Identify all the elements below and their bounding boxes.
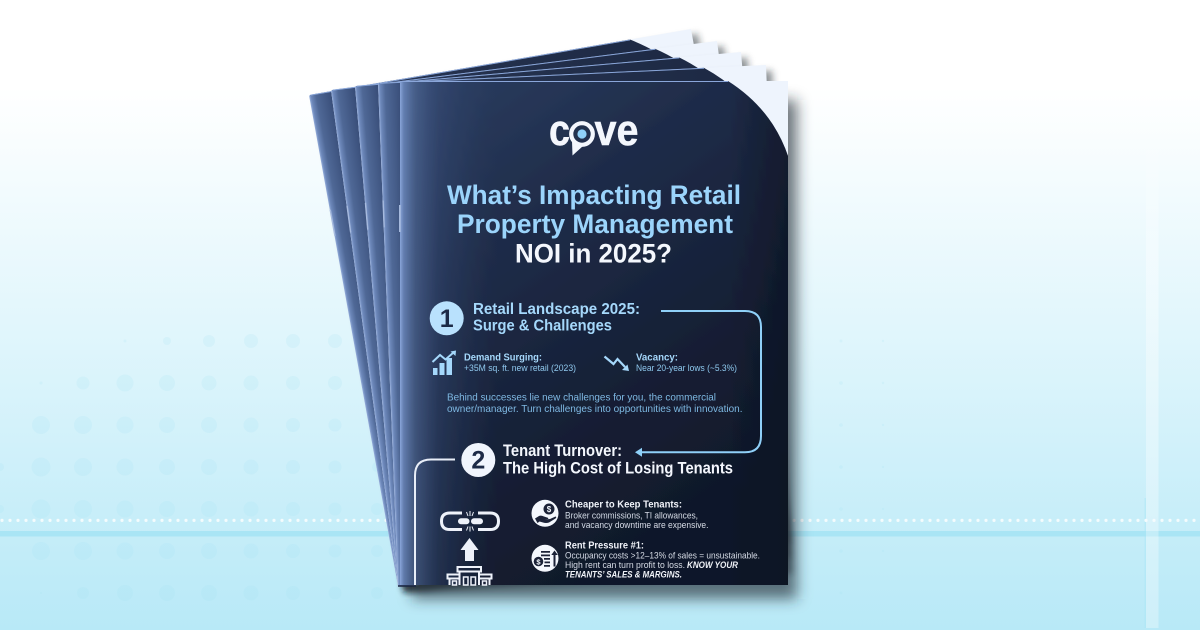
- horizontal blue band: [0, 531, 1200, 536]
- front cover shadow: [412, 100, 797, 599]
- item: cheaper to keep tenants: [532, 499, 708, 530]
- item: rent pressure: High rent can turn profit to loss.: [565, 560, 685, 570]
- item: rent pressure: Occupancy costs >12–13% of sales = unsustainable.: [565, 551, 760, 561]
- back booklet 2: [331, 40, 791, 592]
- section 1 heading: Surge & Challenges: [473, 318, 612, 335]
- icon: falling trend arrow: [604, 356, 629, 371]
- paragraph: challenges: Behind successes lie new challenges for you, the commercial: [447, 391, 716, 403]
- icon: hand holding coin: $: [547, 505, 552, 514]
- section 2 heading: [461, 442, 733, 477]
- number badge 1: [430, 301, 464, 335]
- dot grid pattern: [0, 334, 884, 601]
- number badge 2: [461, 443, 495, 477]
- stat: demand surging: [432, 350, 576, 375]
- title: [447, 180, 741, 269]
- title: Property Management: [457, 209, 733, 239]
- arrow: section 1 to section 2: [635, 311, 761, 457]
- section 2 heading: Tenant Turnover:: [503, 442, 622, 460]
- front booklet cover: [398, 81, 788, 586]
- item: cheaper to keep tenants: Cheaper to Keep Tenants:: [565, 499, 682, 511]
- paragraph: challenges: owner/manager. Turn challenges into opportunities with innovation.: [447, 403, 742, 415]
- icon: coin stack with up arrow: [532, 545, 558, 572]
- cover panel: [398, 81, 788, 586]
- white page corner: [400, 81, 788, 585]
- back booklet 3: [355, 51, 790, 592]
- icon: hand holding coin: [532, 500, 558, 527]
- back booklet 1: [309, 28, 787, 592]
- stat: vacancy: [604, 352, 737, 373]
- item: rent pressure: [532, 539, 760, 579]
- item: rent pressure: TENANTS’ SALES & MARGINS.: [565, 569, 682, 579]
- paragraph: challenges: [447, 391, 742, 415]
- stat: vacancy: Near 20-year lows (~5.3%): [636, 363, 737, 373]
- connector: white line from section 2: [415, 460, 455, 585]
- item: cheaper to keep tenants: and vacancy downtime are expensive.: [565, 520, 708, 530]
- icon: broken chain: [442, 511, 498, 532]
- item: rent pressure: Rent Pressure #1:: [565, 539, 644, 551]
- item: cheaper to keep tenants: Broker commissions, TI allowances,: [565, 510, 698, 520]
- stat: vacancy: Vacancy:: [636, 352, 678, 364]
- title: NOI in 2025?: [515, 239, 672, 269]
- icon: up arrow: [460, 538, 478, 561]
- title: What’s Impacting Retail: [447, 180, 741, 210]
- number badge 2: 2: [471, 447, 485, 475]
- stat: demand surging: +35M sq. ft. new retail (2023): [464, 363, 576, 373]
- number badge 1: 1: [440, 305, 454, 333]
- stat: demand surging: Demand Surging:: [464, 352, 542, 364]
- item: rent pressure: KNOW YOUR: [687, 560, 738, 570]
- section 1 heading: [430, 301, 640, 335]
- icon: coin stack with up arrow: $: [536, 557, 541, 566]
- section 1 heading: Retail Landscape 2025:: [473, 301, 640, 318]
- logo: cove: ve: [594, 106, 638, 155]
- dotted white line: [2, 519, 1200, 522]
- icon: retail building: [448, 567, 492, 585]
- back booklet 4: [378, 65, 792, 592]
- logo: cove: [549, 106, 638, 156]
- section 2 heading: The High Cost of Losing Tenants: [503, 459, 733, 477]
- logo: cove: c: [549, 106, 570, 155]
- booklet stack behind front cover: [309, 28, 792, 592]
- icon: rising bar chart: [432, 350, 456, 375]
- icon: location pin forming the o: [571, 123, 593, 156]
- vertical translucent band: [1144, 130, 1158, 628]
